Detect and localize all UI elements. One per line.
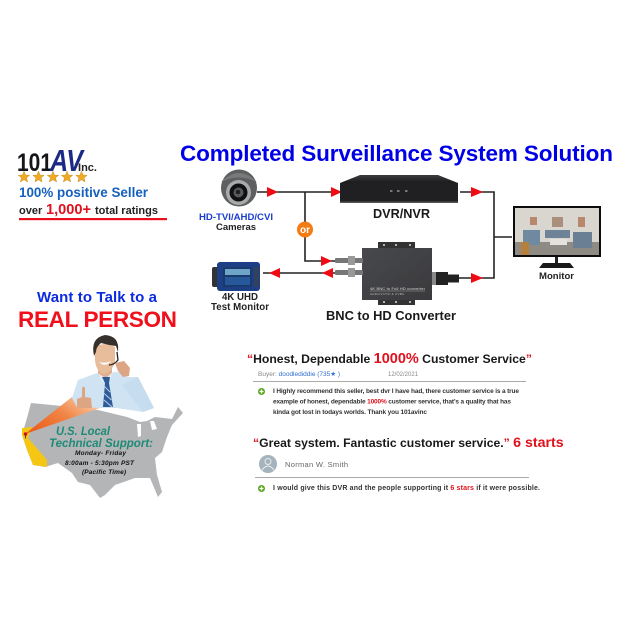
seller rating text [19,185,167,220]
icon: 4K test monitor [212,262,260,291]
headset [109,352,118,365]
collar [97,372,113,383]
five star rating [18,171,87,182]
icon: positive plus [258,388,265,395]
review 2 text: I would give this DVR and the people supporting it 6 stars if it were possible. [273,485,540,492]
seller rating text: total ratings [95,205,158,217]
reviewer avatar and name [255,455,529,478]
support text on map: Technical Support: [49,436,153,450]
test monitor label: Test Monitor [211,302,269,313]
review 1 text [273,388,519,416]
review 1 heading: “Honest, Dependable 1000% Customer Service” [247,351,532,367]
support text on map [49,424,153,476]
logo: 101AV Inc. [17,143,97,178]
thumbs up hand [77,386,92,408]
support agent photo [72,335,154,412]
hand at headset [115,361,130,377]
camera label: HD-TVI/AHD/CVI [199,212,273,223]
review 1 text: example of honest, dependable 1000% customer service, that's a quality that has [273,398,511,406]
seller rating text: 100% positive Seller [19,185,149,200]
support text on map: U.S. Local [56,424,111,438]
connection lines [257,192,512,278]
logo: 101AV Inc.: Inc. [78,162,97,174]
neck [98,368,112,381]
or badge [297,222,313,238]
call to action heading: REAL PERSON [18,307,177,332]
review 1 buyer line: 12/02/2021 [388,372,419,378]
logo: 101AV Inc.: AV [49,143,85,178]
icon: BNC to HD converter: AHD/CVI/TVI & CVBS [370,292,404,296]
or badge: or [300,225,310,236]
support text on map: 8:00am - 5:30pm PST [65,460,135,467]
camera label [199,212,273,233]
California [22,427,47,467]
icon: positive plus [258,485,265,492]
call to action heading [18,289,177,332]
logo: 101AV Inc.: 101 [17,149,52,177]
support text on map: (Pacific Time) [82,469,126,476]
face [95,344,115,374]
icon: monitor with living room [513,206,601,268]
call to action heading: Want to Talk to a [37,289,158,306]
beam from California [25,397,100,434]
HDMI plug [432,272,459,285]
arrows [267,187,483,283]
review 2 heading: “Great system. Fantastic customer service.” 6 starts [253,435,564,451]
title: Completed Surveillance System Solution [180,141,613,166]
seller rating text: over [19,205,43,217]
location pin [24,432,27,438]
icon: DVR/NVR recorder [340,175,458,203]
review 1 text: kinda got lost in todays worlds. Thank you 101avinc [273,409,427,416]
support text on map: Monday- Friday [75,450,126,457]
BNC connectors [335,256,363,277]
test monitor label: 4K UHD [222,292,258,303]
US map [22,397,183,498]
DVR label: DVR/NVR [373,207,430,221]
icon: BNC to HD converter [335,242,459,305]
camera label: Cameras [216,222,256,233]
icon: dome camera [221,170,257,206]
shirt [72,372,154,412]
reviewer avatar and name: Norman W. Smith [285,460,348,469]
seller rating text: 1,000+ [46,202,91,218]
review 1 buyer line [253,370,526,382]
converter label: BNC to HD Converter [326,308,456,323]
hair [93,335,118,356]
test monitor label [211,292,269,313]
monitor label: Monitor [539,271,574,282]
icon: BNC to HD converter: 4K BNC to Full HD converter [370,286,426,291]
smile [99,361,111,365]
great lakes [137,421,157,437]
tie [102,377,113,407]
review 1 buyer line: Buyer: doodlediddie (735★ ) [258,370,340,378]
review 1 text: I Highly recommend this seller, best dvr I have had, there customer service is a true [273,388,519,395]
